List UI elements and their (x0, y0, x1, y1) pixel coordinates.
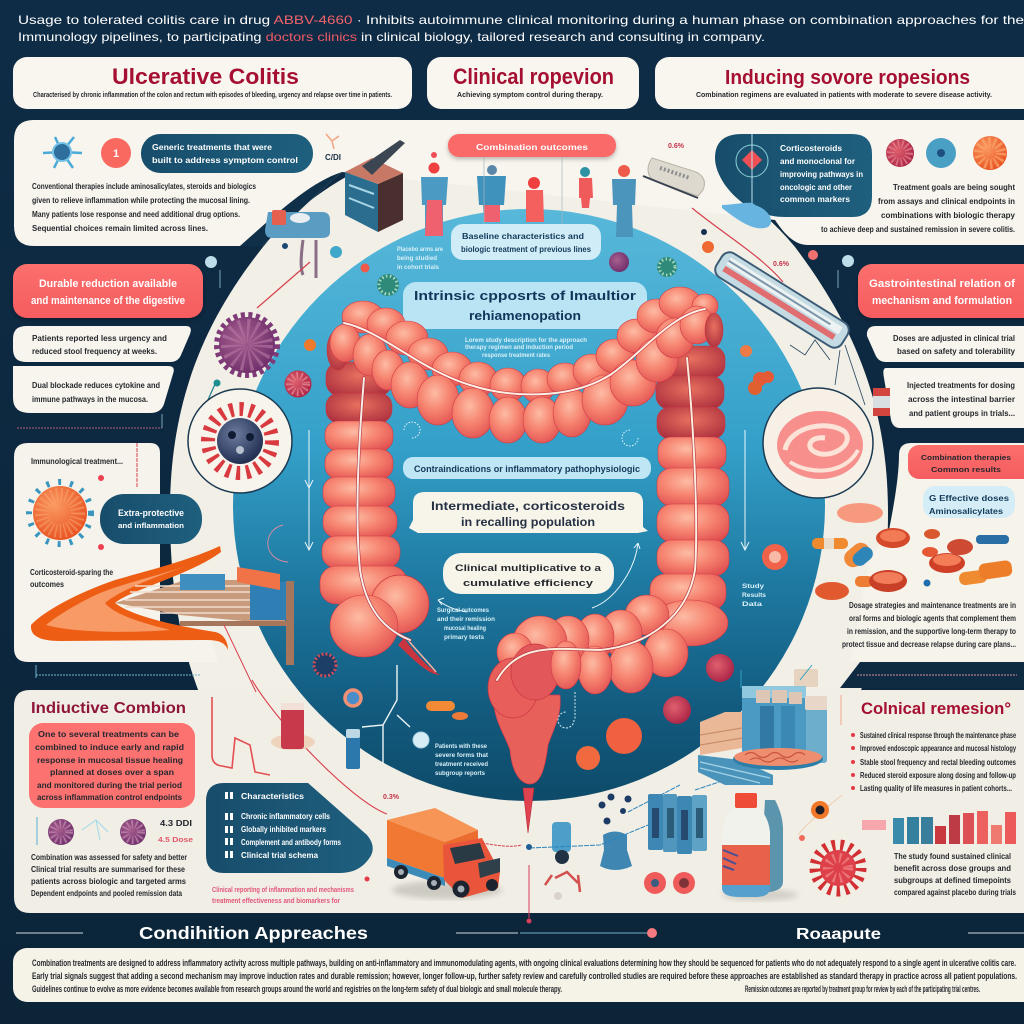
right top callout (715, 134, 1016, 234)
device and connector right of figures (205, 143, 854, 288)
bottom summary card (13, 948, 1024, 1002)
panel: right lower text (841, 695, 1016, 897)
red cups (606, 718, 642, 754)
icon: purple spiky cell (217, 315, 277, 375)
top card: clinical remission (427, 57, 639, 109)
red jar (271, 703, 315, 750)
title text: Usage to tolerated colitis care in drug ABBV-4660 · Inhibits autoimmune clinical monitoring during a human phase on combination approaches for the (18, 13, 1024, 27)
disc small white text (397, 247, 444, 271)
icon: raspberry cell (886, 139, 914, 167)
pale blue label (923, 486, 1015, 518)
pale blue label: Aminosalicylates (929, 507, 1004, 516)
icon: numbered red circle (101, 138, 131, 168)
disc top info pill: Baseline characteristics and (462, 232, 584, 241)
tray (265, 210, 330, 278)
figure 3 (526, 177, 544, 222)
disc heading pill: rehiamenopation (469, 308, 581, 323)
cell pair (644, 872, 666, 894)
left mid card content: outcomes (30, 580, 64, 589)
dark list panel: Characteristics (241, 792, 305, 801)
text block (32, 182, 256, 233)
center label: inflammatory pathophysiologic (403, 457, 651, 479)
dark list panel (206, 783, 373, 873)
connector small (207, 382, 218, 402)
text block: Combination was assessed for safety and better (31, 853, 187, 862)
bottom center objects (526, 780, 861, 924)
pink small text: Clinical reporting of inflammation and mechanisms (212, 887, 354, 894)
pink label: Combination therapies (921, 455, 1011, 462)
wooden board and sign (115, 567, 294, 665)
dark pill label (100, 494, 202, 544)
title text (18, 13, 1024, 44)
pink text box: across inflammation control endpoints (37, 793, 183, 802)
dark callout: Corticosteroids (780, 144, 843, 153)
right text card 2: and patient groups in trials... (909, 409, 1015, 418)
icon: blue disc (926, 138, 956, 168)
dark callout: and monoclonal for (780, 157, 855, 166)
text block: Sequential choices remain limited across lines. (32, 224, 208, 233)
pink callout right: mechanism and formulation (872, 295, 1012, 307)
pink text box: combined to induce early and rapid (35, 743, 184, 752)
top card: inducing severe remissions (655, 57, 1024, 109)
panel: right mid card (850, 443, 1024, 662)
figure 4 (579, 167, 593, 208)
blue tube (346, 729, 360, 769)
pink callout left (13, 264, 203, 318)
left text card 1: reduced stool frequency at weeks. (32, 347, 157, 356)
icon: numbered red circle: 1 (113, 148, 119, 160)
text block (821, 183, 1016, 234)
cecum and appendix (330, 575, 440, 675)
disc small text lower: Data (742, 602, 763, 608)
bottom disc objects (345, 544, 788, 770)
pink small text (212, 876, 370, 905)
icon: orange cell (29, 482, 91, 544)
right mid card content (812, 445, 1024, 649)
figure 2 (477, 165, 506, 222)
icon: orange wedge tissue (31, 546, 228, 650)
thin connector lines by tube (790, 340, 890, 416)
panel: left mid card (14, 443, 218, 662)
dark notch with dashed line (840, 662, 1024, 688)
divider dashes left (17, 270, 220, 678)
center label: considerations (443, 553, 614, 594)
white tube line (344, 309, 705, 680)
right text card 1 (867, 326, 1024, 362)
disc small text lower (435, 584, 767, 777)
right text card 1: Doses are adjusted in clinical trial (893, 334, 1015, 343)
small text below heading: Lorem study description for the approach (465, 338, 587, 344)
left mid card content: Immunological treatment... (31, 457, 123, 466)
icon: raspberry cell small (284, 370, 312, 398)
text block: Clinical trial results are summarised for these (31, 865, 185, 874)
dark list panel: Chronic inflammatory cells (241, 812, 330, 821)
red line charts and jars lower-left ring (212, 680, 400, 814)
center label: intermediate: Intermediate, corticosteroids (431, 499, 625, 513)
disc top info pill (451, 224, 601, 260)
purple cells: 4.3 DDI (160, 819, 192, 828)
center label: inflammatory pathophysiologic: Contraindications or inflammatory pathophysiologic (414, 464, 640, 474)
capsule device (643, 158, 704, 198)
pink heading pill (448, 134, 616, 157)
top card: ulcerative colitis: Characterised by chronic inflammation of the colon and rectum with episodes of bleeding, urgency and relapse over time in patients. (33, 92, 392, 99)
dresser (345, 140, 405, 232)
disc small white text: being studied (397, 256, 437, 262)
disc small text lower: primary tests (444, 635, 485, 641)
right text card 2 (883, 368, 1024, 428)
device and connector right of figures: 0.6% (668, 143, 685, 150)
pink text box: response in mucosal tissue healing (37, 756, 183, 765)
disc small white text: Placebo arms are (397, 247, 444, 253)
dark callout: common markers (780, 195, 851, 204)
top card: clinical remission: Clinical ropevion (453, 64, 614, 89)
pink text box: and monitored during the trial period (37, 781, 182, 790)
disc small text lower: Results (742, 593, 767, 599)
transverse front row (327, 306, 723, 443)
pink callout right: Gastrointestinal relation of (869, 278, 1015, 290)
pink callout right (858, 264, 1024, 318)
sigmoid back row (497, 595, 728, 671)
dark pill label: and inflammation (118, 523, 184, 530)
pink text box: One to several treatments can be (38, 730, 180, 739)
bullet list (851, 731, 1016, 793)
jars and tray cluster (698, 665, 827, 785)
blue connector (722, 203, 771, 228)
left mid card content: Corticosteroid-sparing the (30, 568, 113, 577)
icon: ringed cell small (313, 653, 337, 677)
figure 1 (421, 152, 448, 236)
title text: Immunology pipelines, to participating doctors clinics in clinical biology, tailored research and consulting in company. (18, 30, 765, 44)
pink small text: treatment effectiveness and biomarkers for (212, 898, 340, 905)
disc small text lower: Patients with these (435, 744, 488, 750)
disc decorative cells (304, 252, 774, 395)
vials (648, 794, 707, 854)
panel: lower left and lower band (14, 690, 1024, 913)
text block (894, 852, 1016, 897)
disc heading pill (403, 282, 647, 329)
text block: Many patients lose response and need additional drug options. (32, 210, 240, 219)
dark pill label: Extra-protective (118, 508, 184, 518)
text block: given to relieve inflammation while protecting the mucosal lining. (32, 196, 250, 205)
main cream ring (170, 130, 888, 800)
heading: Indiuctive Combion (31, 700, 186, 717)
red connector lines left ring (224, 625, 256, 692)
text block: subgroups at defined timepoints (894, 876, 1012, 885)
purple cells: 4.5 Dose (158, 837, 193, 844)
circle inset: swirl tissue (763, 388, 873, 498)
blue tube with cell (552, 822, 571, 864)
bottle (722, 793, 798, 901)
top cream band (14, 120, 1024, 246)
center label: considerations: Clinical multiplicative to a (455, 563, 602, 574)
red line charts and jars lower-left ring: 0.3% (383, 794, 400, 801)
bar chart (862, 811, 1016, 844)
small text below heading: response treatment rates (482, 353, 551, 359)
figure 5 (612, 165, 636, 237)
transverse back row (342, 287, 718, 403)
circle inset: virus (188, 389, 292, 493)
icon: orange cell (973, 136, 1007, 170)
pink callout left: Durable reduction available (39, 278, 177, 290)
right text card 1: based on safety and tolerability (897, 347, 1016, 356)
pale blue label: G Effective doses (929, 494, 1010, 503)
panel: lower left content (29, 700, 195, 898)
sigmoid front row (551, 629, 688, 694)
top card: ulcerative colitis (13, 57, 412, 109)
pink label (908, 445, 1024, 479)
dresser and tray left of figures (257, 134, 405, 308)
text block: Dependent endpoints and pooled remission data (31, 889, 182, 898)
dark arc (240, 172, 342, 246)
disc small text lower: treatment received (435, 762, 488, 768)
heading: Colnical remesion° (861, 699, 1011, 718)
disc arrows (268, 422, 749, 612)
bottom summary card: Guidelines continue to evolve as more evidence becomes available from research groups around the world and registries on the long-term safety of dual biologic and small molecule therapy. (32, 984, 562, 994)
disc small text lower: mucosal healing (444, 626, 486, 632)
pills cluster (812, 503, 1013, 600)
red spiky virus (815, 845, 861, 891)
right text card 2: across the intestinal barrier (908, 395, 1015, 404)
top card: clinical remission: Achieving symptom control during therapy. (457, 92, 603, 99)
disc small white text: in cohort trials (397, 265, 440, 271)
dark callout: improving pathways in (780, 170, 863, 179)
truck (387, 808, 522, 899)
left mid card content (29, 443, 202, 589)
disc small text lower: Surgical outcomes (437, 608, 490, 614)
text block: patients across biologic and targeted arms (31, 877, 187, 886)
T connector (362, 665, 410, 765)
text block: Conventional therapies include aminosalicylates, steroids and biologics (32, 182, 256, 191)
pills (426, 701, 455, 711)
left text card 1 (13, 326, 191, 362)
rectum (488, 644, 560, 833)
device and connector right of figures: 0.6% (773, 261, 790, 268)
top left callout (32, 134, 313, 233)
small text below heading (465, 338, 587, 359)
label: C/DI (325, 153, 341, 162)
disc small text lower: and their remission (437, 617, 495, 623)
dark callout: oncologic and other (780, 183, 852, 192)
disc small text lower: severe forms that (435, 753, 488, 759)
section heading: condition approaches: Condihition Appreaches (139, 923, 368, 943)
section heading: roaapute: Roaapute (796, 926, 881, 943)
dark list panel: Globally inhibited markers (241, 825, 326, 834)
left text card 2: Dual blockade reduces cytokine and (32, 381, 160, 390)
center label: considerations: cumulative efficiency (463, 578, 594, 589)
dark pill: built to address symptom control (152, 156, 298, 165)
right text card 2: Injected treatments for dosing (907, 381, 1015, 390)
dark callout (715, 134, 872, 217)
center label: intermediate (409, 492, 648, 533)
blue stopper (600, 832, 632, 870)
dark list panel: Complement and antibody forms (241, 838, 341, 847)
colon illustration (320, 287, 729, 833)
disc top info pill: biologic treatment of previous lines (461, 245, 592, 254)
blue disc (233, 209, 825, 801)
disc heading pill: Intrinsic cpposrts of Imaultior (414, 288, 636, 303)
teal pin (214, 380, 220, 386)
small text below heading: therapy regimen and induction period (465, 345, 573, 351)
text block: benefit across dose groups and (894, 864, 1011, 873)
virus right (706, 654, 734, 682)
pink label: Common results (931, 467, 1001, 474)
ascending colon segments (320, 362, 407, 604)
text block: Treatment goals are being sought (893, 183, 1015, 192)
red marks (545, 872, 580, 892)
glass tube (712, 249, 852, 351)
dark pill (141, 134, 313, 173)
ring cell (345, 690, 361, 706)
pink text box: planned at doses over a span (50, 768, 174, 777)
purple cells (37, 817, 193, 845)
flower cell (798, 795, 842, 841)
left text card 2 (13, 366, 174, 413)
dark list panel: Clinical trial schema (241, 851, 319, 860)
descending colon segments (650, 346, 729, 610)
text block (842, 601, 1016, 649)
top card: inducing severe remissions: Inducing sovore ropesions (725, 67, 970, 89)
section heading: roaapute (520, 926, 1024, 943)
top center figures group (421, 134, 636, 237)
top card: inducing severe remissions: Combination regimens are evaluated in patients with moderate to severe disease activity. (696, 92, 992, 99)
pink heading pill: Combination outcomes (476, 143, 589, 152)
left text card 2: immune pathways in the mucosa. (32, 395, 148, 404)
text block: combinations with biologic therapy (881, 211, 1016, 220)
pink callout left: and maintenance of the digestive (31, 295, 185, 307)
text block (31, 853, 187, 898)
connector dots (530, 780, 725, 848)
disc small text lower: Study (742, 584, 765, 590)
text block: from assays and clinical endpoints in (878, 197, 1015, 206)
left text card 1: Patients reported less urgency and (32, 334, 167, 343)
pink text box (29, 723, 195, 808)
icon: blue cell (43, 137, 82, 168)
top card: ulcerative colitis: Ulcerative Colitis (112, 64, 299, 89)
disc small text lower: subgroup reports (435, 771, 486, 777)
center label: intermediate: in recalling population (461, 515, 595, 529)
dark pill: Generic treatments that were (152, 143, 273, 152)
text block: The study found sustained clinical (894, 852, 1011, 861)
